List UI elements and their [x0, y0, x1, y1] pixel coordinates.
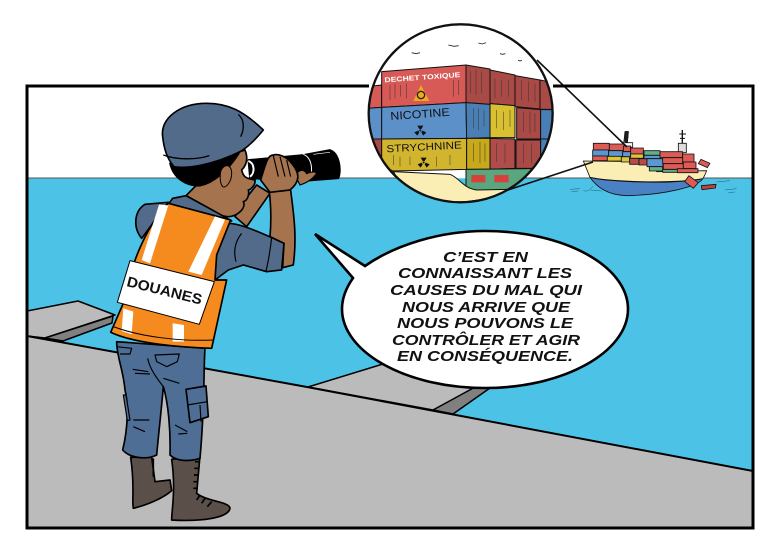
speech text: CONNAISSANT LES	[398, 265, 572, 282]
trouser folds	[117, 347, 207, 434]
trousers	[117, 342, 205, 461]
speech text: C’EST EN	[443, 249, 529, 266]
cap	[162, 103, 263, 167]
jetty: right	[308, 364, 490, 414]
cargo pocket	[186, 386, 208, 423]
front boot	[172, 456, 230, 520]
container shading marks	[390, 70, 535, 167]
reflective stripes	[122, 205, 225, 342]
fingers	[273, 156, 291, 177]
side pocket	[123, 395, 130, 421]
speech text: CAUSES DU MAL QUI	[390, 282, 583, 299]
ship funnel and mast	[623, 130, 686, 153]
rear boot	[131, 457, 172, 508]
speech text: CONTRÔLER ET AGIR	[392, 331, 580, 349]
label: DECHET TOXIQUE: DECHET TOXIQUE	[384, 72, 461, 84]
lens outline	[369, 24, 553, 202]
container ship	[570, 130, 737, 196]
sleeve	[215, 223, 284, 280]
ship hull	[583, 161, 707, 196]
upper body	[111, 103, 340, 348]
birds	[412, 43, 522, 61]
neck and face	[186, 150, 255, 217]
speech bubble	[315, 231, 628, 388]
left shoulder	[136, 202, 168, 238]
icon: biohazard	[413, 85, 429, 101]
magnified containers	[370, 64, 552, 202]
sleeve cuff	[235, 233, 272, 271]
far hand	[295, 170, 317, 185]
legs	[117, 342, 230, 520]
collar and back	[168, 196, 232, 221]
ship ripples	[570, 181, 737, 193]
icon: radiation strychnine	[418, 158, 430, 168]
jetty: left	[27, 301, 115, 341]
far arm	[235, 185, 270, 227]
telescope	[248, 150, 340, 181]
panel border	[27, 86, 753, 528]
DOUANES badge	[117, 261, 214, 324]
callout lines to ship	[508, 60, 627, 190]
magnifier circle	[360, 24, 560, 208]
speech text	[390, 249, 583, 365]
speech text: NOUS ARRIVE QUE	[402, 299, 571, 316]
cap seam	[163, 114, 243, 159]
speech text: EN CONSÉQUENCE.	[397, 348, 573, 365]
quay	[27, 336, 753, 528]
label: STRYCHNINE: STRYCHNINE	[386, 140, 462, 155]
ear	[220, 166, 232, 187]
near hand	[261, 155, 298, 192]
customs officer	[111, 103, 340, 520]
vest	[111, 203, 231, 348]
hair	[170, 150, 240, 186]
near arm	[268, 185, 295, 268]
boot laces	[153, 458, 212, 507]
icon: radiation nicotine	[414, 126, 426, 136]
badge text: DOUANES	[125, 274, 204, 309]
panel: harbour scene	[28, 178, 752, 526]
label: NICOTINE: NICOTINE	[390, 107, 451, 123]
vest hem	[113, 327, 213, 340]
speech text: NOUS POUVONS LE	[397, 315, 574, 332]
ship containers	[593, 143, 716, 190]
sea	[28, 178, 752, 470]
